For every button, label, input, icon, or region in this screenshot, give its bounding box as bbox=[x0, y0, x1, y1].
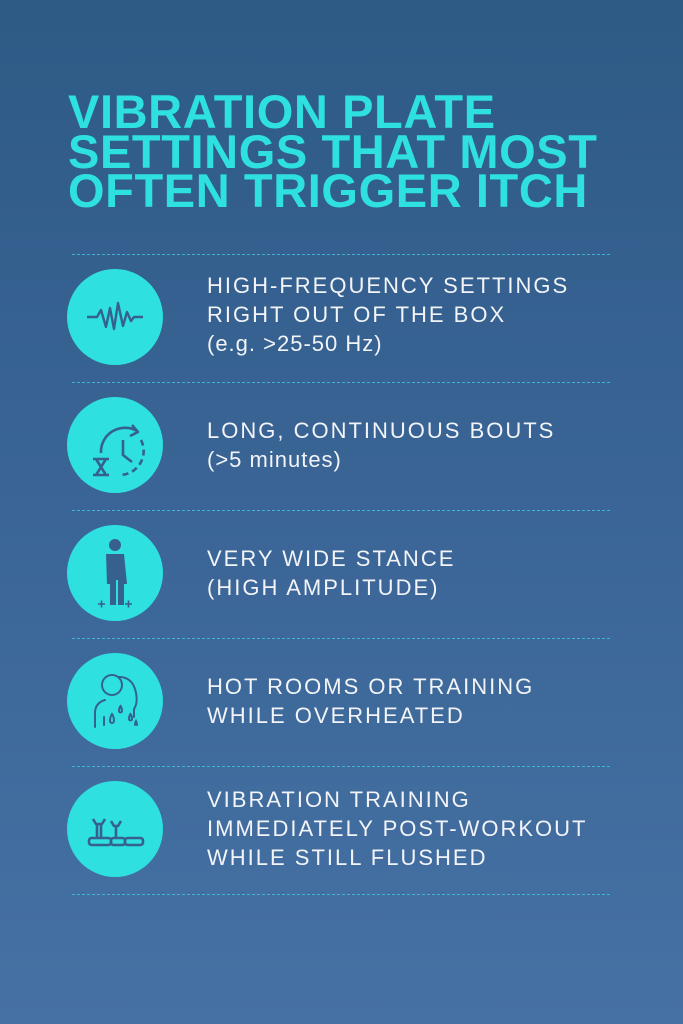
text: long bouts bbox=[207, 418, 555, 472]
text: post-workout bbox=[207, 787, 587, 870]
text: high-frequency bbox=[207, 273, 569, 356]
text: high-frequency: RIGHT OUT OF THE BOX bbox=[207, 302, 506, 327]
text: high-frequency: HIGH-FREQUENCY SETTINGS bbox=[207, 273, 569, 298]
text: long bouts: LONG, CONTINUOUS BOUTS bbox=[207, 418, 555, 443]
text: hot rooms: HOT ROOMS OR TRAINING bbox=[207, 674, 534, 699]
title: VIBRATION PLATE bbox=[68, 85, 496, 138]
title: OFTEN TRIGGER ITCH bbox=[68, 164, 588, 217]
text: wide stance bbox=[207, 546, 455, 600]
text: post-workout: WHILE STILL FLUSHED bbox=[207, 845, 487, 870]
text: hot rooms: WHILE OVERHEATED bbox=[207, 703, 465, 728]
text: wide stance: VERY WIDE STANCE bbox=[207, 546, 455, 571]
text: long bouts: (>5 minutes) bbox=[207, 447, 342, 472]
text: wide stance: (HIGH AMPLITUDE) bbox=[207, 575, 439, 600]
icon: vibration plates bbox=[67, 781, 163, 877]
title bbox=[68, 85, 598, 217]
icon: waveform bbox=[67, 269, 163, 365]
title: SETTINGS THAT MOST bbox=[68, 124, 598, 178]
text: high-frequency: (e.g. >25-50 Hz) bbox=[207, 331, 383, 356]
icon: clock with hourglass bbox=[67, 397, 163, 493]
text: post-workout: IMMEDIATELY POST-WORKOUT bbox=[207, 816, 587, 841]
icon: sweating person bbox=[67, 653, 163, 749]
text: post-workout: VIBRATION TRAINING bbox=[207, 787, 471, 812]
text: hot rooms bbox=[207, 674, 534, 728]
icon: person standing bbox=[67, 525, 163, 621]
